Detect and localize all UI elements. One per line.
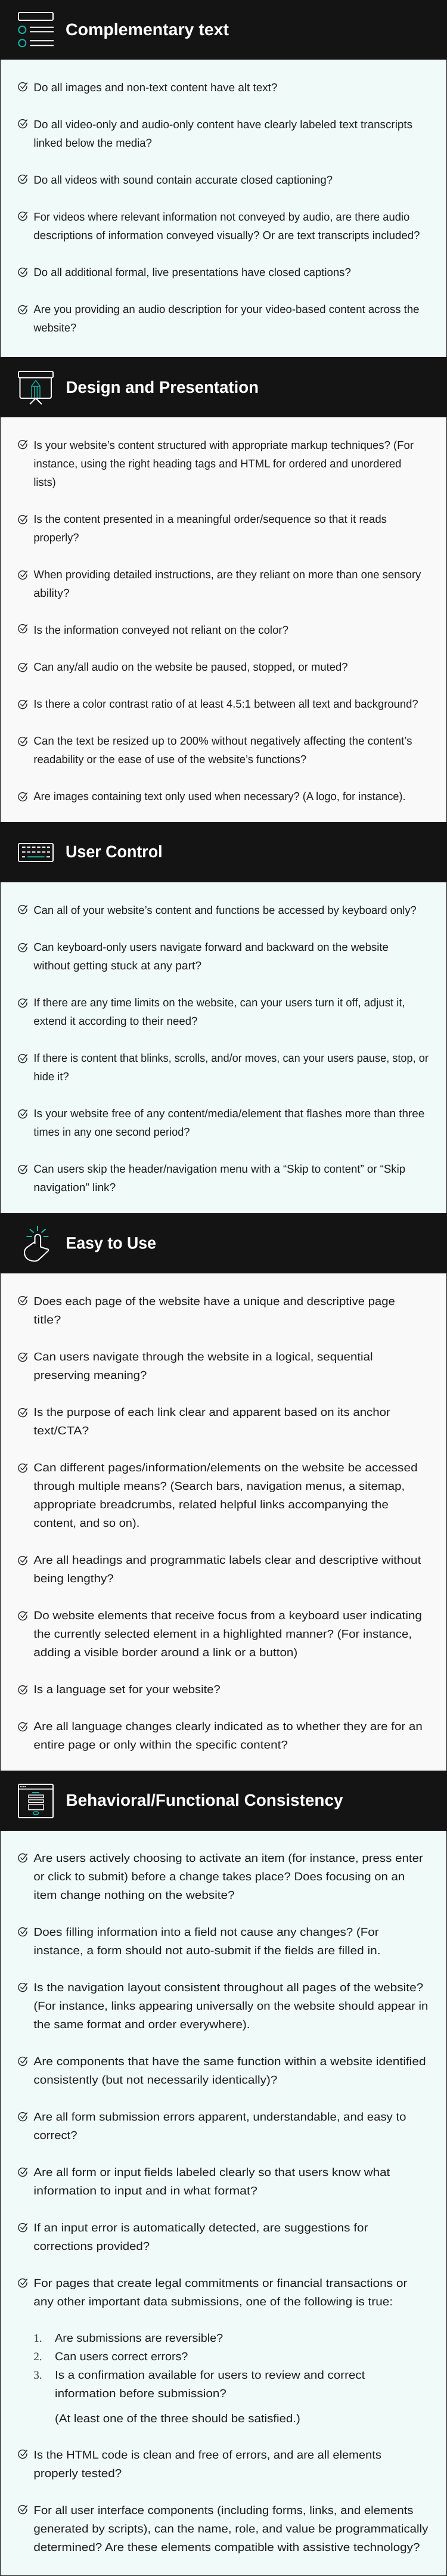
item <box>18 1982 428 2031</box>
item <box>18 735 412 766</box>
check icon <box>18 625 27 633</box>
check icon <box>18 516 27 524</box>
check icon <box>18 2113 27 2121</box>
check icon <box>18 793 27 801</box>
item: Is the content presented in a meaningful order/sequence so that it reads <box>33 513 387 526</box>
item with numbered list: Can users correct errors? <box>55 2351 188 2363</box>
item <box>18 2222 368 2253</box>
item: item change nothing on the website? <box>33 1889 235 1902</box>
item: Do all video-only and audio-only content have clearly labeled text transcripts <box>33 119 412 131</box>
item: Is the HTML code is clean and free of errors, and are all elements <box>33 2449 381 2462</box>
item with numbered list: Are submissions are reversible? <box>55 2332 223 2345</box>
item: Is the purpose of each link clear and apparent based on its anchor <box>33 1406 391 1419</box>
item <box>18 1852 424 1902</box>
item: (For instance, links appearing universally on the website should appear in <box>33 2000 428 2013</box>
item: being lengthy? <box>33 1573 114 1585</box>
check icon <box>18 1055 27 1063</box>
item <box>18 2504 429 2554</box>
item: Do all videos with sound contain accurate closed captioning? <box>33 174 333 187</box>
item: or click to submit) before a change takes place? Does focusing on an <box>33 1871 405 1883</box>
item: appropriate breadcrumbs, related helpful links accompanying the <box>33 1499 389 1511</box>
item <box>18 997 405 1028</box>
heading: Easy to Use <box>66 1234 156 1253</box>
item: title? <box>33 1314 61 1326</box>
panel: Easy to Use <box>0 1213 447 1771</box>
check icon <box>18 120 27 128</box>
item <box>18 439 414 489</box>
check icon <box>18 1165 27 1174</box>
heading: Design and Presentation <box>66 378 259 396</box>
icon: list <box>18 13 54 47</box>
check icon <box>18 2506 27 2514</box>
item: Can keyboard-only users navigate forward and backward on the website <box>33 941 389 954</box>
item <box>18 2166 390 2197</box>
item: Are all language changes clearly indicated as to whether they are for an <box>33 1721 423 1733</box>
item <box>18 1163 405 1194</box>
item: Do all additional formal, live presentations have closed captions? <box>33 266 351 279</box>
item <box>18 513 387 544</box>
item: times in any one second period? <box>33 1126 190 1139</box>
check icon <box>18 1723 27 1731</box>
check icon <box>18 1353 27 1362</box>
item: Is the information conveyed not reliant on the color? <box>33 624 288 637</box>
check icon <box>18 1557 27 1565</box>
item with numbered list: 2. <box>33 2351 42 2363</box>
icon: presentation board with pencil <box>18 371 53 404</box>
item <box>18 2111 406 2142</box>
panel background <box>1 417 446 822</box>
item: linked below the media? <box>33 137 152 150</box>
item: If there is content that blinks, scrolls, and/or moves, can your users pause, stop, or <box>33 1052 429 1065</box>
item: Does filling information into a field not cause any changes? (For <box>33 1926 379 1939</box>
check icon <box>18 906 27 914</box>
item: Are all form submission errors apparent, understandable, and easy to <box>33 2111 406 2124</box>
check icon <box>18 441 27 449</box>
item: descriptions of information conveyed visually? Or are text transcripts included? <box>33 230 420 242</box>
check icon <box>18 2168 27 2177</box>
item: Can different pages/information/elements on the website be accessed <box>33 1462 418 1474</box>
item: Can users navigate through the website in a logical, sequential <box>33 1351 373 1363</box>
check icon <box>18 175 27 184</box>
check icon <box>18 944 27 952</box>
item with numbered list <box>18 2277 408 2425</box>
item: readability or the ease of use of the website’s functions? <box>33 754 306 766</box>
panel: Behavioral/Functional Consistency <box>0 1771 447 2575</box>
panel: Complementary text <box>0 0 447 357</box>
item: the same format and order everywhere). <box>33 2019 250 2031</box>
heading: User Control <box>66 842 163 861</box>
item: Are images containing text only used when necessary? (A logo, for instance). <box>33 791 406 803</box>
item: navigation” link? <box>33 1182 116 1194</box>
item: Are you providing an audio description for your video-based content across the <box>33 303 419 316</box>
item: properly? <box>33 532 79 544</box>
item: Is the navigation layout consistent throughout all pages of the website? <box>33 1982 423 1994</box>
item: If an input error is automatically detected, are suggestions for <box>33 2222 368 2234</box>
section header <box>0 0 447 60</box>
item: Is your website’s content structured with appropriate markup techniques? (For <box>33 439 414 452</box>
icon: web form window <box>18 1784 53 1818</box>
section header <box>0 1771 447 1831</box>
item <box>18 1610 422 1659</box>
check icon <box>18 664 27 672</box>
check icon <box>18 999 27 1008</box>
item: corrections provided? <box>33 2240 150 2253</box>
item: adding a visible border around a link or a button) <box>33 1647 297 1659</box>
item: without getting stuck at any part? <box>33 960 201 972</box>
check icon <box>18 737 27 746</box>
heading: Complementary text <box>66 20 229 39</box>
item: Are components that have the same function within a website identified <box>33 2056 426 2068</box>
item: information to input and in what format? <box>33 2185 257 2197</box>
item with numbered list: 1. <box>33 2332 42 2345</box>
section header <box>0 822 447 882</box>
item: website? <box>33 322 76 334</box>
item: generated by scripts), can the name, role, and value be programmatically <box>33 2523 429 2535</box>
item <box>18 119 412 150</box>
item: properly tested? <box>33 2467 122 2480</box>
check icon <box>18 1612 27 1620</box>
item: Are all form or input fields labeled clearly so that users know what <box>33 2166 390 2179</box>
item: Is your website free of any content/media/element that flashes more than three <box>33 1108 424 1120</box>
heading: Behavioral/Functional Consistency <box>66 1791 343 1809</box>
panel: Design and Presentation <box>0 357 447 822</box>
item: the currently selected element in a highlighted manner? (For instance, <box>33 1628 412 1641</box>
item: instance, using the right heading tags and HTML for ordered and unordered <box>33 458 401 470</box>
item <box>18 211 420 242</box>
item: instance, a form should not auto-submit if the fields are filled in. <box>33 1945 380 1957</box>
item: correct? <box>33 2129 77 2142</box>
item with numbered list: Is a confirmation available for users to review and correct <box>55 2369 365 2382</box>
section header <box>0 1213 447 1273</box>
section header <box>0 357 447 417</box>
item: Is there a color contrast ratio of at least 4.5:1 between all text and background? <box>33 698 418 711</box>
item: lists) <box>33 476 56 489</box>
item <box>18 569 421 600</box>
item <box>18 303 420 334</box>
item: When providing detailed instructions, are they reliant on more than one sensory <box>33 569 421 581</box>
item <box>18 1721 423 1752</box>
check icon <box>18 1854 27 1862</box>
item: hide it? <box>33 1071 69 1083</box>
panel background <box>1 1273 446 1771</box>
check icon <box>18 212 27 221</box>
item: Do website elements that receive focus from a keyboard user indicating <box>33 1610 422 1622</box>
check icon <box>18 1110 27 1118</box>
item with numbered list: information before submission? <box>55 2388 226 2400</box>
item: Is a language set for your website? <box>33 1684 221 1696</box>
item <box>18 1295 395 1326</box>
item <box>18 941 389 972</box>
item: determined? Are these elements compatible with assistive technology? <box>33 2541 420 2554</box>
item: Can the text be resized up to 200% without negatively affecting the content’s <box>33 735 412 748</box>
check icon <box>18 83 27 91</box>
check icon <box>18 2279 27 2287</box>
check icon <box>18 700 27 709</box>
check icon <box>18 2224 27 2232</box>
item: content, and so on). <box>33 1517 139 1530</box>
panel background <box>1 1831 446 2575</box>
item <box>18 1554 421 1585</box>
item: through multiple means? (Search bars, navigation menus, a sitemap, <box>33 1480 405 1493</box>
item: Does each page of the website have a unique and descriptive page <box>33 1295 395 1308</box>
icon: keyboard <box>18 844 53 861</box>
item <box>18 1406 391 1437</box>
icon: tapping hand <box>24 1226 48 1261</box>
panel: User Control <box>0 822 447 1213</box>
item: extend it according to their need? <box>33 1015 197 1028</box>
check icon <box>18 571 27 579</box>
item: For all user interface components (including forms, links, and elements <box>33 2504 413 2517</box>
check icon <box>18 1686 27 1694</box>
item: If there are any time limits on the website, can your users turn it off, adjust it, <box>33 997 405 1009</box>
item <box>18 1108 424 1139</box>
item <box>18 2449 381 2480</box>
item: Are users actively choosing to activate an item (for instance, press enter <box>33 1852 424 1865</box>
item: Are all headings and programmatic labels clear and descriptive without <box>33 1554 421 1567</box>
check icon <box>18 1464 27 1473</box>
item <box>18 1052 429 1083</box>
item: consistently (but not necessarily identically)? <box>33 2074 277 2087</box>
item <box>18 1462 418 1530</box>
item with numbered list: 3. <box>33 2369 42 2382</box>
item: entire page or only within the specific content? <box>33 1739 288 1752</box>
check icon <box>18 268 27 277</box>
check icon <box>18 1409 27 1417</box>
check icon <box>18 306 27 314</box>
item <box>18 1351 373 1382</box>
item: ability? <box>33 587 70 600</box>
panel background <box>1 882 446 1213</box>
item with numbered list: (At least one of the three should be satisfied.) <box>55 2413 300 2425</box>
item: Can users skip the header/navigation menu with a “Skip to content” or “Skip <box>33 1163 405 1176</box>
check icon <box>18 2450 27 2459</box>
check icon <box>18 1297 27 1305</box>
item with numbered list: For pages that create legal commitments or financial transactions or <box>33 2277 408 2290</box>
item <box>18 1926 381 1957</box>
item: preserving meaning? <box>33 1369 147 1382</box>
item: text/CTA? <box>33 1425 89 1437</box>
item: Do all images and non-text content have alt text? <box>33 82 277 94</box>
item: For videos where relevant information not conveyed by audio, are there audio <box>33 211 409 224</box>
item: Can any/all audio on the website be paused, stopped, or muted? <box>33 661 347 674</box>
check icon <box>18 1983 27 1992</box>
item: Can all of your website’s content and functions be accessed by keyboard only? <box>33 904 417 917</box>
check icon <box>18 1928 27 1936</box>
item with numbered list: any other important data submissions, one of the following is true: <box>33 2296 393 2308</box>
panel background <box>1 60 446 357</box>
item <box>18 2056 426 2087</box>
check icon <box>18 2057 27 2066</box>
